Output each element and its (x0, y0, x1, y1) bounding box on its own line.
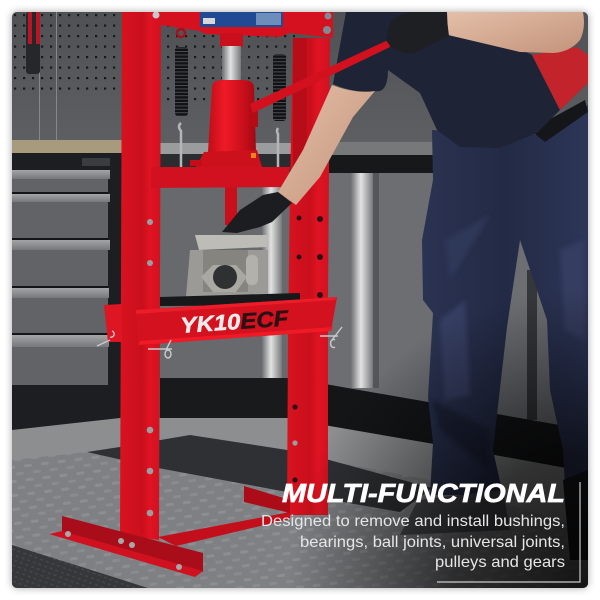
return springs (175, 29, 286, 168)
upper arm (447, 12, 584, 53)
hanging tool (26, 12, 40, 74)
text backdrop shade (303, 310, 588, 588)
right post (287, 38, 330, 515)
centre wall (160, 172, 295, 380)
shirt red panel (532, 47, 588, 110)
heading: MULTI-FUNCTIONAL (282, 478, 565, 508)
jack handle (250, 40, 390, 113)
upper glove (386, 12, 449, 54)
left post (120, 12, 161, 540)
trouser folds (432, 215, 585, 470)
jack support beam and ram (151, 167, 290, 225)
right cabinet (328, 173, 558, 424)
post holes (147, 216, 323, 516)
blue rating plate (200, 12, 283, 27)
worktop (12, 140, 122, 153)
press bed (104, 297, 337, 345)
black press plates (160, 293, 300, 306)
belt (530, 100, 588, 142)
floor (12, 418, 566, 523)
trousers (422, 105, 588, 520)
bolts (152, 12, 332, 34)
left drawer cabinet (12, 153, 122, 433)
corner accent line (437, 482, 580, 582)
R-clip pins (97, 327, 342, 358)
model badge: YK10ECF (180, 305, 290, 338)
description: bearings, ball joints, universal joints, (300, 534, 565, 551)
shirt (333, 12, 560, 148)
description (261, 513, 565, 571)
lower glove (222, 192, 292, 233)
top beam (147, 12, 333, 38)
description: Designed to remove and install bushings, (261, 513, 565, 530)
worker (222, 12, 588, 560)
shoes (400, 470, 588, 560)
engine block workpiece (186, 235, 268, 297)
description: pulleys and gears (435, 554, 565, 571)
bottle jack (190, 33, 262, 167)
lower arm (278, 85, 375, 205)
base feet (49, 486, 290, 577)
press frame (120, 12, 333, 540)
